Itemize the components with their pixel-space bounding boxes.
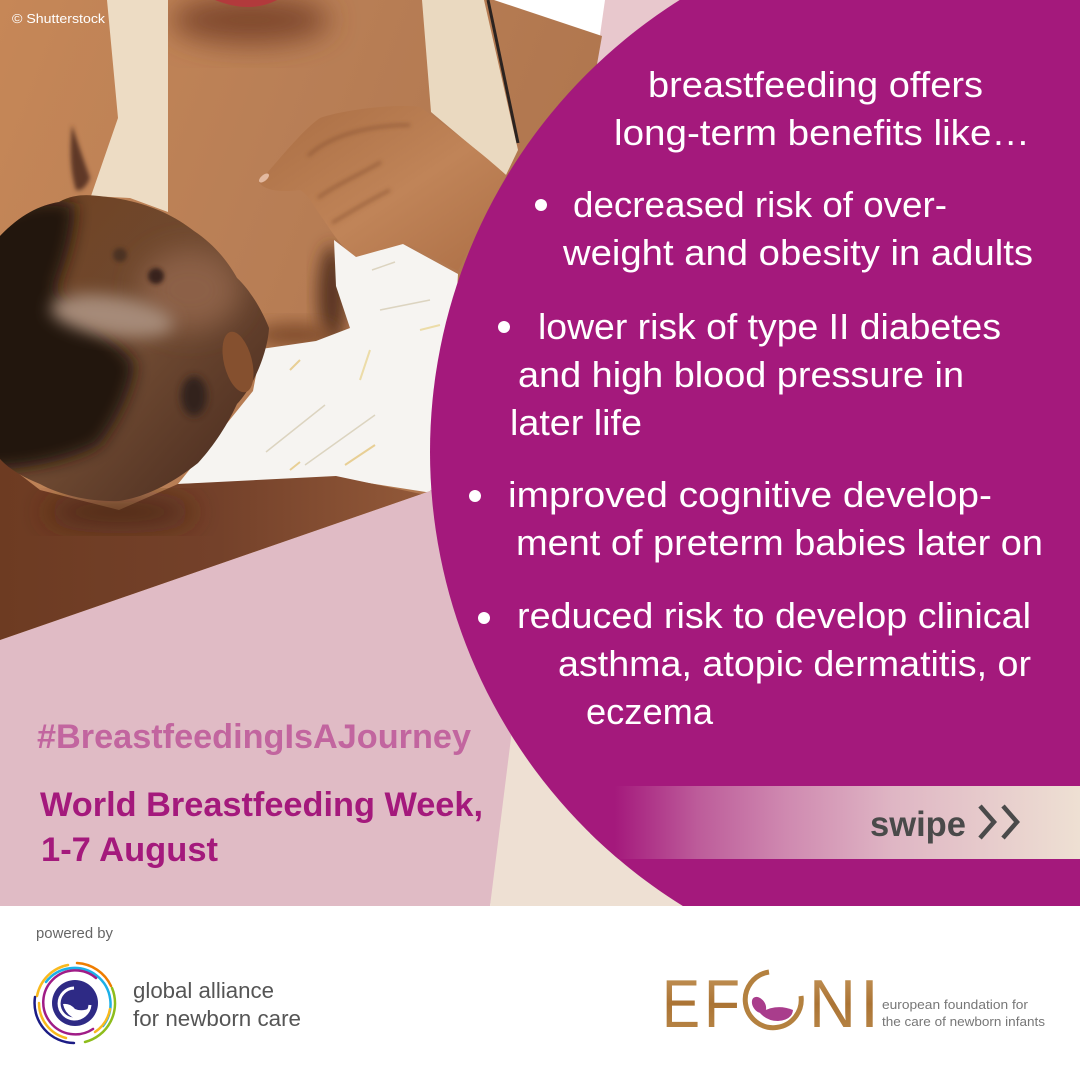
icon: double chevron arrow [980, 806, 1017, 838]
bullet: overweight: decreased risk of over- [573, 184, 947, 225]
logo: EFCNI [662, 966, 1046, 1042]
bullet: overweight: weight and obesity in adults [562, 232, 1033, 273]
wordmark letters: F [704, 966, 740, 1042]
left strap [91, 0, 168, 212]
logo: global alliance for newborn care [35, 963, 301, 1043]
wordmark letters: I [860, 966, 879, 1042]
shadow beneath head [45, 500, 195, 524]
powered by label: powered by [36, 925, 113, 942]
bullet: asthma: asthma, atopic dermatitis, or [558, 643, 1031, 684]
neck and chin shadow [170, 0, 330, 44]
hair spots [148, 268, 164, 284]
bullet: cognitive development: improved cognitive develop- [508, 474, 992, 515]
heading [614, 64, 1030, 153]
wordmark letters: E [662, 966, 700, 1042]
photo: mother breastfeeding baby [0, 0, 620, 660]
ear [222, 332, 254, 392]
swipe band [590, 786, 1080, 859]
icon: C-shaped cradle [745, 972, 801, 1028]
bullet: diabetes: later life [510, 402, 642, 443]
event title: World Breastfeeding Week, [40, 786, 483, 824]
black bra strap [488, 0, 518, 143]
underarm shadow [71, 125, 90, 190]
lips [215, 0, 277, 7]
bullet: asthma: eczema [586, 691, 714, 732]
foundation name: european foundation for [882, 997, 1029, 1012]
wordmark letters [662, 966, 879, 1042]
bullet: diabetes: and high blood pressure in [518, 354, 964, 395]
bullet: cognitive development [469, 474, 1043, 563]
swipe label: swipe [870, 805, 966, 844]
bullet: diabetes [498, 306, 1001, 443]
bullet: diabetes: lower risk of type II diabetes [538, 306, 1001, 347]
baby's head [0, 195, 269, 502]
heading: long-term benefits like… [614, 112, 1030, 153]
event title: 1-7 August [41, 831, 218, 869]
event title [40, 786, 483, 869]
panel: pink top right corner [595, 0, 720, 110]
baby's clothing [178, 240, 458, 495]
panel: purple circle [430, 0, 1080, 986]
heading: breastfeeding offers [648, 64, 983, 105]
wordmark letters: N [809, 966, 856, 1042]
icon: ring logo [35, 963, 115, 1043]
bullet: cognitive development: ment of preterm babies later on [516, 522, 1043, 563]
organisation name: global alliance [133, 978, 274, 1003]
hair [0, 200, 135, 470]
right strap [422, 0, 518, 175]
bullet: asthma: reduced risk to develop clinical [517, 595, 1031, 636]
logo: EFCNI: the care of newborn infants [882, 1014, 1046, 1029]
panel: beige wedge [490, 730, 720, 906]
icon: baby in cradle [749, 994, 793, 1021]
mother's hand [259, 108, 506, 256]
hashtag: #BreastfeedingIsAJourney [37, 718, 471, 756]
logo: global alliance for newborn care: for newborn care [133, 1006, 301, 1031]
light scalp patch [48, 288, 176, 344]
panel: pink lower left [0, 486, 560, 906]
forehead highlight [140, 250, 240, 330]
breast shadow [318, 245, 346, 345]
photo credit: © Shutterstock [12, 11, 106, 26]
bullet: asthma [478, 595, 1031, 732]
mother's forearm [0, 459, 440, 650]
bullet: overweight [535, 184, 1033, 273]
